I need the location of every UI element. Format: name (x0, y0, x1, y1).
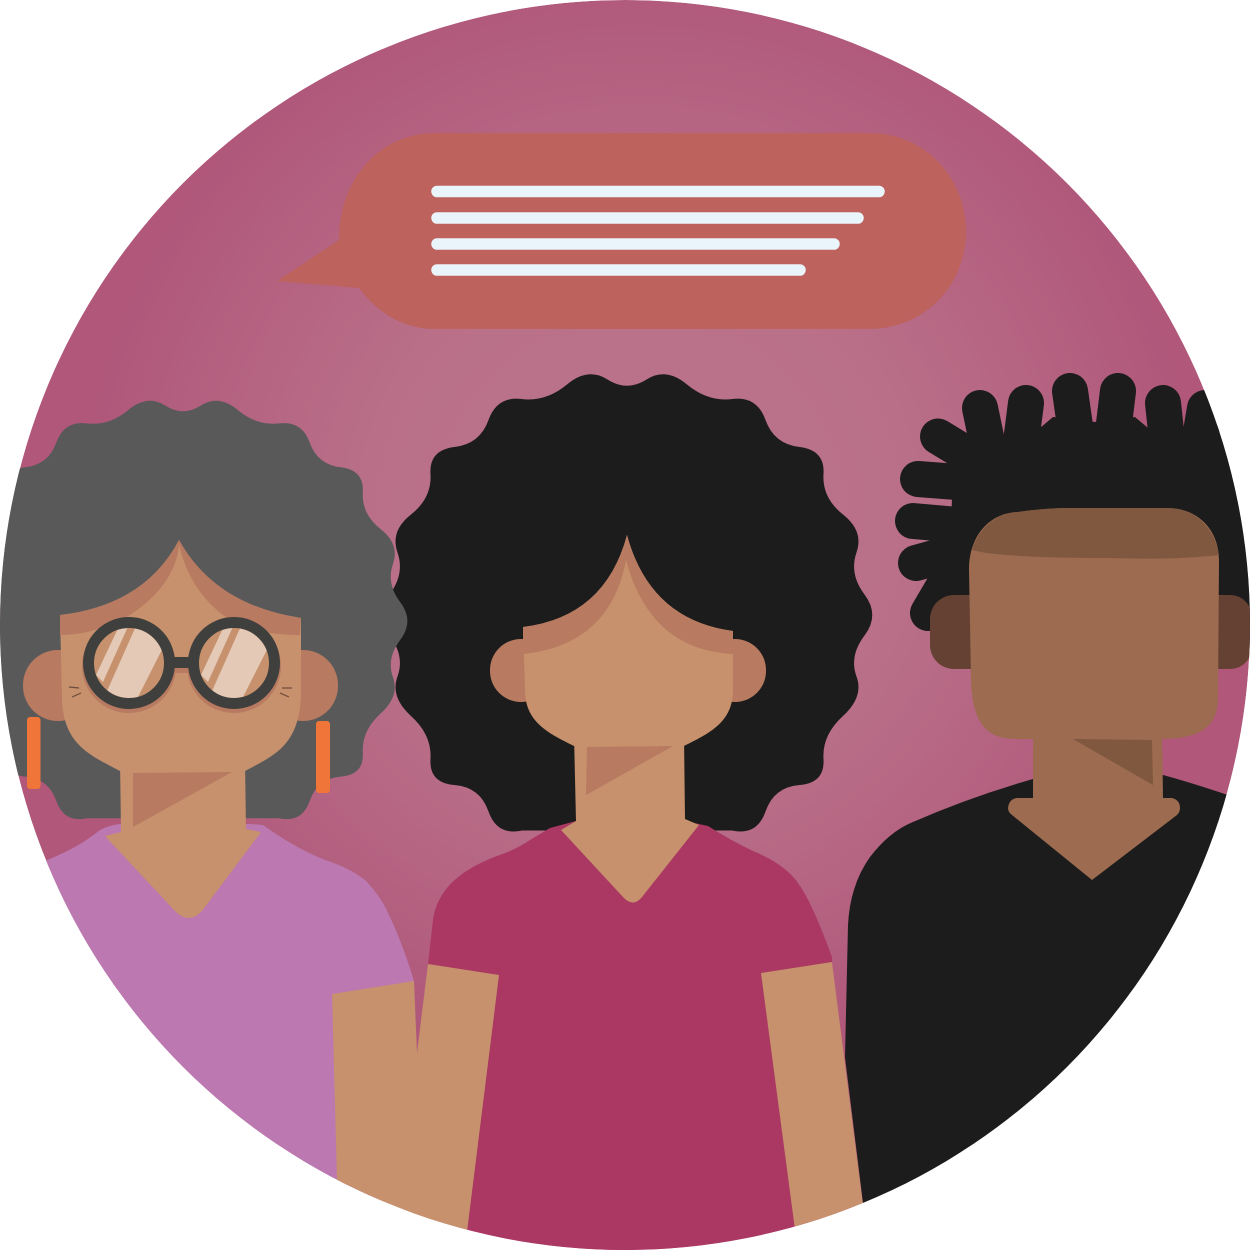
speech bubble (277, 133, 966, 329)
face (523, 535, 733, 746)
afro hair (382, 374, 872, 832)
ears (23, 650, 338, 721)
person: middle woman body (400, 535, 870, 1250)
arm, viewer right (761, 962, 863, 1226)
forehead shadow (60, 540, 301, 635)
shirt (428, 821, 863, 1250)
person: right man (845, 391, 1250, 1250)
glasses (82, 619, 281, 713)
neck shadow (1073, 739, 1153, 785)
neck shadow (133, 772, 232, 827)
bubble text lines (437, 192, 879, 270)
person: left woman (0, 401, 450, 1250)
face (60, 540, 301, 771)
person: middle woman (382, 374, 872, 832)
neck and collar (561, 735, 699, 902)
arm, viewer left (400, 964, 499, 1240)
forehead shadow (972, 508, 1219, 559)
neck shadow (586, 746, 673, 795)
bubble shape (277, 133, 966, 329)
grey hair (0, 401, 407, 819)
left arm (332, 981, 440, 1222)
neck and collar (105, 760, 261, 918)
ears (930, 595, 1250, 669)
face (969, 508, 1219, 739)
crow's feet (69, 687, 292, 697)
hair locs (913, 391, 1250, 650)
shirt (46, 824, 414, 1196)
forehead shadow (523, 535, 733, 654)
ears (490, 639, 766, 702)
shirt (845, 775, 1226, 1203)
earrings (27, 717, 330, 793)
neck (1008, 730, 1180, 880)
